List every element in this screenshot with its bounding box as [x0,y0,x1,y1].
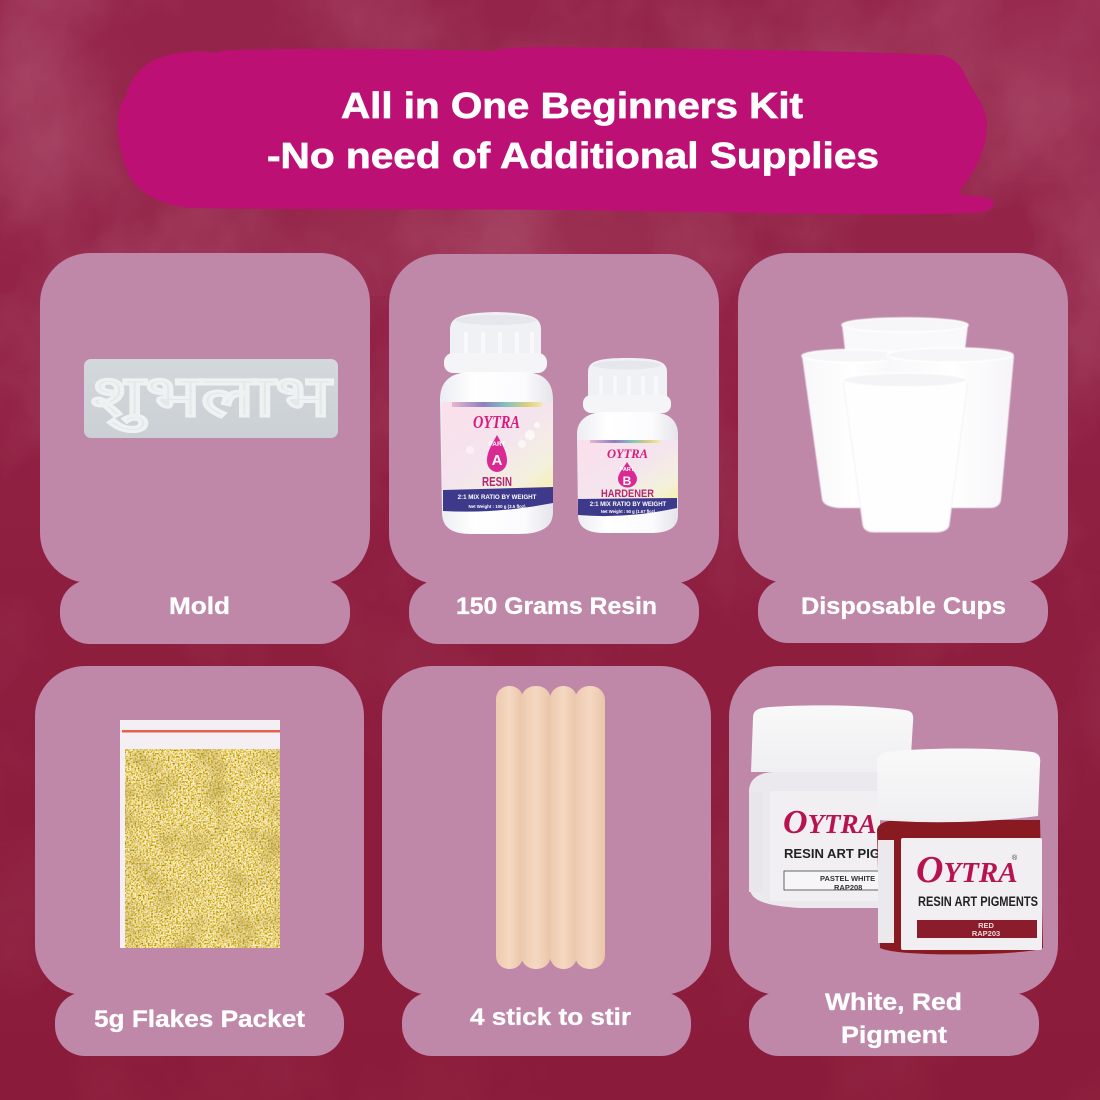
icon: red pigment jar: RESIN ART PIGMENTS [918,894,1038,909]
card [389,254,719,584]
label pill [55,992,344,1056]
icon: red pigment jar: ® [1012,854,1018,862]
icon: red pigment jar: RED [978,921,994,930]
banner brush shape [118,47,994,214]
panel: pigments [729,666,1058,1056]
icon: four wooden stir sticks [496,686,605,969]
icon: resin bottle part A: OYTRA [473,412,520,432]
icon: white pigment jar: OYTRA [783,804,877,841]
icon: silicone mold with Shubh Labh lettering [84,359,338,438]
icon: resin bottle part A: A [492,452,503,469]
label pill [749,992,1039,1056]
icon: white pigment jar [749,705,913,908]
card [729,666,1058,995]
label line 1: White, Red [825,989,962,1016]
icon: white pigment jar: RESIN ART PIG [784,846,880,861]
label pill [402,992,691,1056]
title line 1: All in One Beginners Kit [341,85,803,126]
label: 4 stick to stir [470,1004,631,1031]
icon: hardener bottle part B: Net Weight : 50 g (1.67 floz) [601,509,656,514]
front cup [843,374,968,532]
label pill [60,580,350,644]
icon: red pigment jar [877,748,1043,954]
icon: hardener bottle part B: OYTRA [607,446,648,461]
icon: resin bottle part A: PART [488,441,506,448]
panel: resin [389,254,719,644]
icon: red pigment jar: RAP203 [972,929,1000,938]
right cup [887,349,1014,508]
background: crimson mottled texture [0,0,1100,548]
label: Mold [169,593,230,620]
label pill [758,579,1048,643]
icon: resin bottle part A: RESIN [482,474,512,489]
panel: flakes [35,666,364,1056]
panel: cups [738,253,1068,643]
label line 2: Pigment [841,1022,947,1049]
label: 5g Flakes Packet [94,1006,305,1033]
icon: red pigment jar: OYTRA [916,849,1018,891]
icon: resin bottle part A: 2:1 MIX RATIO BY WEIGHT [458,494,537,501]
card [738,253,1068,583]
title banner [118,47,994,214]
back cup [842,318,968,375]
label: Disposable Cups [801,593,1006,620]
icon: white pigment jar: RAP208 [834,883,862,892]
icon: stack of paper cups [802,318,1014,532]
left cup [802,349,905,508]
panel: mold [40,253,370,644]
label: 150 Grams Resin [456,593,657,620]
icon: hardener bottle part B: 2:1 MIX RATIO BY WEIGHT [590,502,667,508]
panel: sticks [382,666,711,1056]
card [382,666,711,995]
icon: resin bottle part A [440,312,553,534]
label pill [409,580,699,644]
icon: hardener bottle part B: B [623,474,632,488]
icon: silicone mold with Shubh Labh lettering: शुभलाभ [91,364,334,433]
icon: resin bottle part A: Net Weight : 100 g (3.5 floz) [468,504,526,509]
icon: hardener bottle part B [577,358,678,533]
card [40,253,370,583]
icon: gold flakes packet [120,720,280,948]
title line 2: -No need of Additional Supplies [267,135,879,176]
icon: hardener bottle part B: PART [620,467,635,473]
icon: white pigment jar: PASTEL WHITE [820,874,875,883]
icon: hardener bottle part B: HARDENER [601,488,654,500]
card [35,666,364,995]
